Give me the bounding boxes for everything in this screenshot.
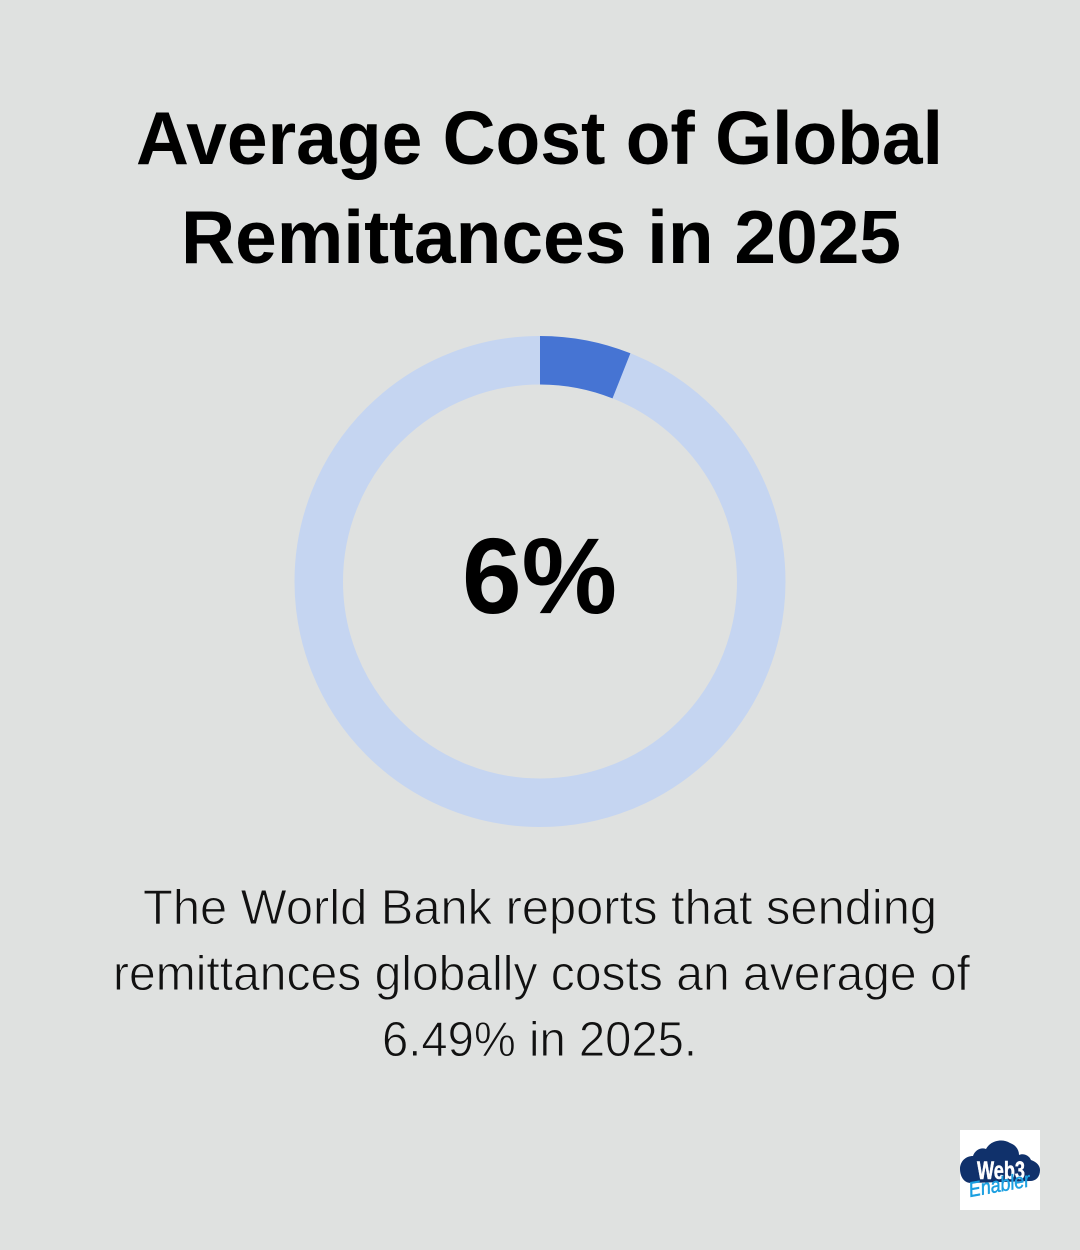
donut chart <box>319 336 761 803</box>
center value: 6% <box>462 515 617 636</box>
logo word: Enabler: Enabler <box>967 1168 1033 1202</box>
description text <box>113 881 970 1067</box>
description text: remittances globally costs an average of <box>113 947 970 1001</box>
donut segment: 6% <box>540 336 630 398</box>
icon: cloud <box>960 1141 1040 1183</box>
donut track <box>319 360 761 803</box>
title: Remittances in 2025 <box>181 195 901 279</box>
description text: The World Bank reports that sending <box>143 881 937 935</box>
logo word: Web3: Web3 <box>977 1157 1025 1185</box>
title <box>136 96 943 279</box>
title: Average Cost of Global <box>136 96 943 180</box>
description text: 6.49% in 2025. <box>382 1013 697 1067</box>
logo: Web3 Enabler <box>960 1130 1040 1210</box>
